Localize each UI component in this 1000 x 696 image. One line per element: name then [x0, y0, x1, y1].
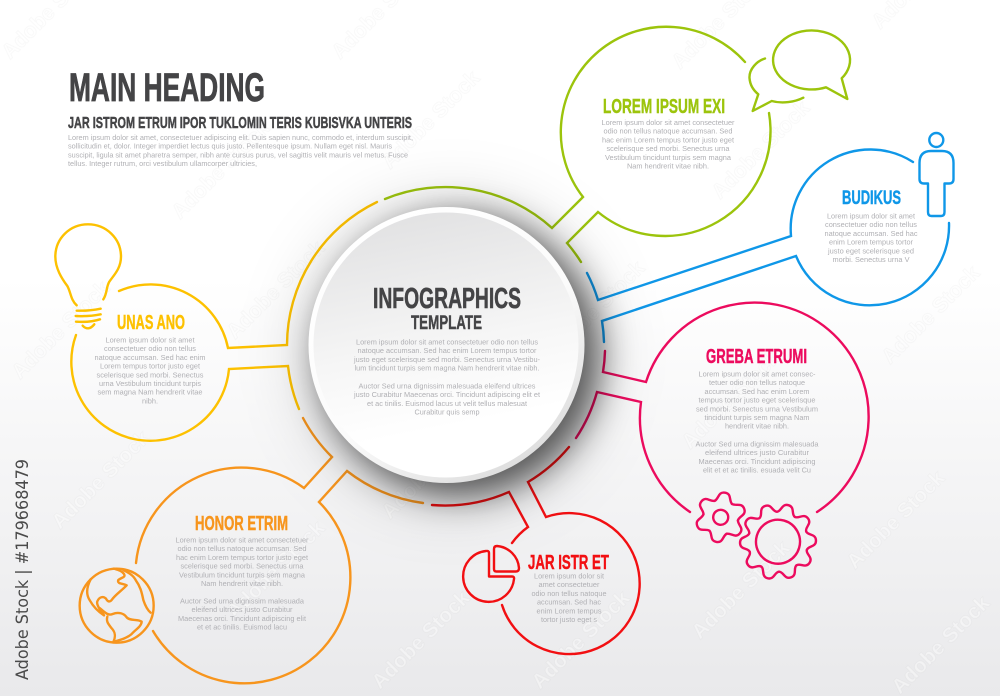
orange body text: odio non tellus natoque accumsan. Sed [178, 544, 306, 553]
orange body text: eleifend ultrices justo Curabitur [192, 605, 293, 614]
pink body text: hendrerit vitae nibh. [725, 422, 789, 431]
pink body text [696, 370, 819, 475]
watermark pattern: Adobe Stock [887, 591, 995, 696]
green heading: LOREM IPSUM EXI [603, 95, 725, 118]
orange body text: Auctor Sed urna dignissim malesuada [180, 596, 305, 606]
watermark pattern: Adobe Stock [707, 96, 815, 204]
center body text: et ac tinilis. Euismod lacus ut velit tellus malesuat [367, 399, 528, 408]
blue body text [824, 212, 918, 264]
watermark pattern: Adobe Stock [877, 261, 985, 369]
orange body text: Maecenas orci. Tincidunt adipiscing elit [178, 614, 307, 623]
pink outline and connector [576, 303, 869, 512]
icon: person [920, 133, 954, 216]
green body text [602, 118, 735, 170]
blue outline and connector [587, 149, 949, 342]
watermark pattern: Adobe Stock [377, 66, 485, 174]
red outline and connector [432, 447, 640, 654]
title block [68, 66, 413, 168]
blue body text: Lorem ipsum dolor sit amet [827, 212, 916, 220]
orange body text: et et ac tinilis. Euismod lacu [197, 623, 287, 632]
orange body text: scelerisque sed morbi. Senectus urna [180, 562, 304, 571]
icon: globe [80, 569, 154, 643]
pink body text: sed morbi. Senectus urna Vestibulum [696, 404, 818, 413]
green body text: Vestibulum tincidunt turpis sem magna [605, 153, 732, 162]
center subheading: TEMPLATE [411, 313, 482, 334]
watermark pattern: Adobe Stock [367, 586, 475, 694]
watermark pattern: Adobe Stock [542, 256, 650, 364]
pink body text: Auctor Sed urna dignissim malesuada [696, 440, 819, 448]
yellow outline and connector [71, 202, 377, 441]
intro paragraph: Lorem ipsum dolor sit amet, consectetuer adipiscing elit. Duis sapien nunc, commodo et, interdum suscipit, [68, 133, 413, 142]
yellow heading: UNAS ANO [117, 312, 185, 334]
panel: yellow - unas ano [55, 202, 377, 441]
pink body text: accumsan. Sed hac enim Lorem [704, 387, 810, 396]
intro paragraph: tellus. Integer rutrum, orci vestibulum ullamcorper ultricies, [68, 159, 257, 168]
panel: central disc [308, 207, 584, 483]
watermark pattern: Adobe Stock [677, 346, 785, 454]
orange body text: Lorem ipsum dolor sit amet consectetuer [176, 536, 309, 544]
green body text: hac enim Lorem tempus tortor justo eget [602, 135, 735, 144]
center body text: natoque accumsan. Sed hac enim Lorem tempus tortor [358, 346, 537, 355]
watermark pattern: Adobe Stock [527, 586, 635, 694]
red body text [532, 572, 606, 624]
pink body text: eleifend ultrices justo Curabitur [705, 448, 809, 457]
blue body text: morbi. Senectus urna V [832, 255, 910, 264]
yellow body text: sem magna Nam hendrerit vitae [98, 388, 202, 397]
pink body text: tempus tortor justo eget scelerisque [698, 396, 816, 405]
orange body text: Nam hendrerit vitae nibh. [201, 579, 283, 588]
yellow body text: scelerisque sed morbi. Senectus [96, 370, 204, 379]
pink body text: Maecenas orci. Tincidunt adipiscing [698, 457, 816, 466]
panel: green - lorem ipsum exi [385, 27, 850, 262]
yellow body text: urna Vestibulum tincidunt turpis [99, 379, 201, 388]
disc rim [308, 207, 584, 483]
icon: gears [691, 488, 826, 589]
yellow body text [94, 336, 206, 405]
green body text: Lorem ipsum dolor sit amet consectetuer [602, 118, 735, 127]
side credit label: Adobe Stock | #179668479 [13, 459, 33, 680]
blue body text: consectetuer odio non tellus [825, 220, 917, 229]
green body text: Nam hendrerit vitae nibh. [627, 162, 709, 170]
blue body text: enim Lorem tempus tortor [829, 238, 913, 247]
icon: light bulb [55, 224, 121, 328]
red heading: JAR ISTR ET [528, 552, 609, 574]
icon: pie chart [463, 546, 519, 602]
central disc shadow [302, 202, 602, 502]
pink body text: Lorem ipsum dolor sit amet consec- [698, 370, 816, 378]
blue body text: justo eget scelerisque sed [827, 246, 914, 255]
watermark pattern: Adobe Stock [687, 536, 795, 644]
center heading: INFOGRAPHICS [373, 283, 521, 315]
watermark pattern: Adobe Stock [47, 426, 155, 534]
panel: blue - budikus [587, 133, 954, 342]
watermark pattern: Adobe Stock [7, 276, 115, 384]
orange body text: Vestibulum tincidunt turpis sem magna [179, 570, 306, 579]
yellow body text: natoque accumsan. Sed hac enim [94, 353, 206, 362]
pink heading: GREBA ETRUMI [706, 346, 807, 368]
panel: red - jar istr et [432, 447, 640, 654]
disc face [314, 212, 578, 478]
green outline and connector [385, 27, 770, 262]
pink body text: tetuer odio non tellus natoque [709, 378, 805, 387]
center body text: Auctor Sed urna dignissim malesuada eleifend ultrices [358, 382, 536, 390]
green body text: scelerisque sed morbi. Senectus urna [606, 144, 730, 153]
center body text: lum tincidunt turpis sem magna Nam hendrerit vitae nibh. [354, 364, 540, 373]
center body text [353, 338, 541, 417]
yellow body text: consectetuer odio non tellus [104, 344, 196, 353]
center body text: justo eget scelerisque sed morbi. Senectus urna Vestibu- [353, 355, 540, 364]
red body text: enim Lorem tempus [536, 606, 602, 615]
watermark pattern: Adobe Stock [222, 236, 330, 344]
subheading: JAR ISTROM ETRUM IPOR TUKLOMIN TERIS KUBISVKA UNTERIS [68, 115, 412, 132]
orange body text: hac enim Lorem tempus tortor justo eget [176, 553, 309, 562]
red body text: accumsan. Sed hac [537, 598, 601, 607]
green body text: odio non tellus natoque accumsan. Sed [604, 127, 732, 136]
watermark pattern: Adobe Stock [167, 116, 275, 224]
panel: orange - honor etrim [80, 418, 423, 683]
watermark pattern: Adobe Stock [842, 466, 950, 574]
intro paragraph [68, 133, 413, 168]
center body text: Lorem ipsum dolor sit amet consectetuer odio non tellus [356, 338, 538, 346]
pink body text: tincidunt turpis sem magna Nam [704, 413, 810, 422]
pink body text: elit et et ac tinilis. esuada velit Cu [703, 466, 811, 475]
icon: speech bubbles [749, 30, 850, 111]
orange body text [176, 536, 309, 632]
red body text: Lorem ipsum dolor sit [534, 572, 605, 580]
watermark pattern: Adobe Stock [377, 416, 485, 524]
red body text: amet consectetuer [538, 580, 600, 589]
watermark pattern: Adobe Stock [222, 516, 330, 624]
intro paragraph: suscipit, ligula sit amet pharetra semper, nibh ante cursus purus, vel sagittis velit mauris vel metus. Fusce [68, 150, 408, 159]
yellow body text: nibh. [142, 396, 158, 405]
orange heading: HONOR ETRIM [195, 513, 288, 535]
yellow body text: Lorem tempus tortor justo eget [100, 362, 201, 371]
center body text: justo Curabitur Maecenas orci. Tincidunt adipiscing elit et [353, 390, 541, 399]
blue body text: natoque accumsan. Sed hac [824, 229, 918, 238]
yellow body text: Lorem ipsum dolor sit amet [106, 336, 195, 344]
red body text: odio non tellus natoque [532, 589, 606, 598]
panel: pink - greba etrumi [576, 303, 869, 589]
blue heading: BUDIKUS [842, 187, 901, 209]
orange outline and connector [136, 418, 423, 683]
main heading: MAIN HEADING [69, 66, 265, 110]
center body text: Curabitur quis semp [414, 408, 480, 417]
red body text: tortor justo eget s [541, 615, 597, 624]
intro paragraph: sollicitudin et, dolor. Integer imperdiet lectus quis justo. Pellentesque ipsum. Nullam eget nisl. Mauris [68, 142, 392, 151]
